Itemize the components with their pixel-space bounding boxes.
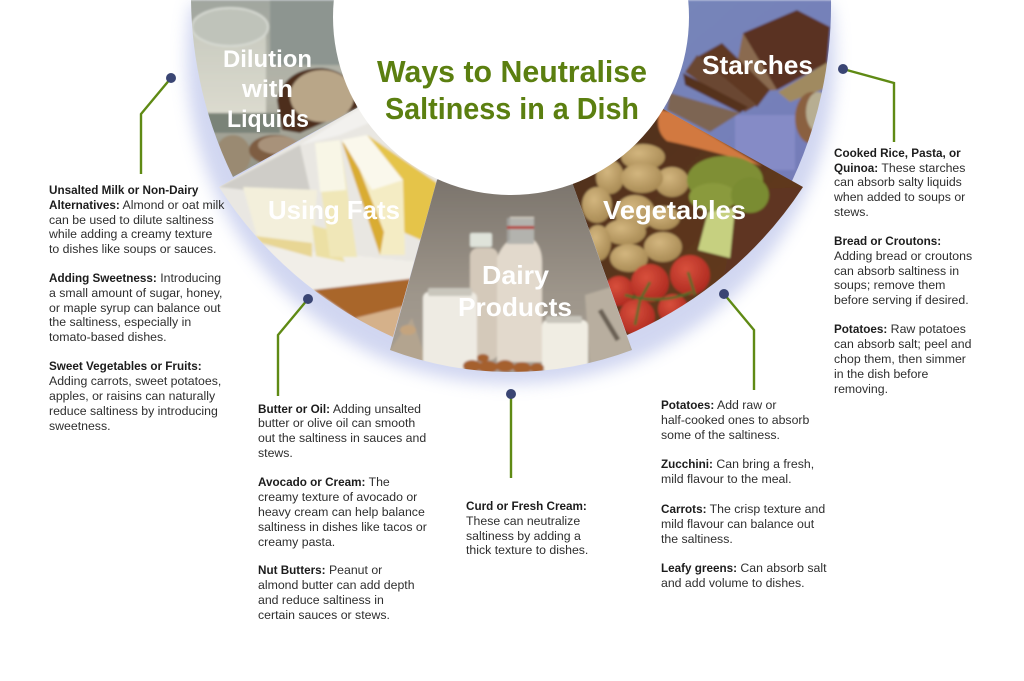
text block: fats tips: butter or olive oil can smooth — [258, 416, 415, 430]
soft blue glow around the fan — [187, 4, 835, 384]
text block: starch tips: can absorb salt; peel and — [834, 337, 972, 351]
text block: fats tips — [258, 402, 427, 622]
text block: dairy tips: These can neutralize — [466, 514, 580, 528]
text block: vegetable tips: Potatoes: Add raw or — [661, 398, 776, 412]
text block: dairy tips: thick texture to dishes. — [466, 543, 588, 557]
text block: starch tips: before serving if desired. — [834, 293, 969, 307]
text block: dilution tips: Unsalted Milk or Non-Dairy — [49, 184, 199, 197]
text block: starch tips: Cooked Rice, Pasta, or — [834, 147, 961, 160]
text block: fats tips: saltiness in dishes like tacos or — [258, 520, 427, 534]
connector: starches — [838, 64, 894, 142]
panel: dilution with liquids photo — [191, 0, 358, 177]
text block: starch tips: Quinoa: These starches — [834, 161, 965, 175]
text block: vegetable tips: half-cooked ones to absorb — [661, 413, 810, 427]
text block: dilution tips: reduce saltiness by introducing — [49, 404, 218, 418]
text block: starch tips: Adding bread or croutons — [834, 249, 972, 263]
panel: vegetables photo — [572, 109, 803, 335]
text block: vegetable tips: and add volume to dishes. — [661, 576, 805, 590]
text block: dilution tips: or maple syrup can balance out — [49, 301, 221, 315]
heading: dilution with liquids: Dilution — [223, 46, 312, 73]
text block: starch tips: Potatoes: Raw potatoes — [834, 322, 966, 336]
bottles — [470, 248, 498, 360]
heading: dilution with liquids: Liquids — [227, 106, 309, 133]
panel: dairy products photo — [385, 175, 635, 375]
text block: dilution tips: while adding a creamy texture — [48, 227, 213, 241]
bread slices — [697, 43, 770, 107]
heading: dairy products: Products — [458, 292, 572, 322]
text block: fats tips: certain sauces or stews. — [258, 608, 390, 622]
almonds — [400, 325, 544, 374]
text block: fats tips: Avocado or Cream: The — [258, 475, 390, 489]
text block: dilution tips: Sweet Vegetables or Fruits: — [49, 360, 202, 373]
text block: dilution tips: apples, or raisins can naturally — [49, 389, 216, 403]
butter blocks — [367, 135, 437, 243]
text block: dairy tips: Curd or Fresh Cream: — [466, 500, 587, 513]
text block: vegetable tips: some of the saltiness. — [661, 428, 780, 442]
text block: dilution tips — [48, 184, 225, 433]
text block: fats tips: Butter or Oil: Adding unsalted — [258, 402, 421, 416]
bread loaf — [743, 10, 830, 90]
broccoli — [698, 208, 735, 258]
heading: dilution with liquids — [223, 46, 312, 133]
tomatoes — [604, 255, 710, 335]
connector: dilution — [141, 73, 176, 174]
potatoes — [582, 144, 689, 272]
text block: vegetable tips: Leafy greens: Can absorb salt — [661, 561, 827, 575]
text block: vegetable tips: mild flavour to the meal. — [661, 472, 792, 486]
connector: dairy — [506, 389, 516, 478]
text block: dilution tips: a small amount of sugar, honey, — [49, 286, 222, 300]
title: Ways to Neutralise — [377, 54, 647, 89]
text block: starch tips — [833, 147, 972, 396]
heading: vegetables: Vegetables — [603, 195, 746, 225]
connector: vegetables — [719, 289, 754, 390]
text block: fats tips: out the saltiness in sauces and — [258, 431, 426, 445]
text block: starch tips: can absorb saltiness in — [834, 264, 959, 278]
panel: starches photo — [664, 0, 831, 181]
text block: fats tips: heavy cream can help balance — [258, 505, 425, 519]
centre circle — [333, 0, 689, 195]
text block: starch tips: stews. — [834, 205, 869, 219]
text block: starch tips: soups; remove them — [834, 278, 945, 292]
text block: fats tips: stews. — [258, 446, 293, 460]
heading: dilution with liquids: with — [241, 76, 293, 103]
text block: vegetable tips: mild flavour can balance out — [661, 517, 815, 531]
title — [377, 54, 647, 126]
heading: dairy products: Dairy — [482, 260, 550, 290]
text block: dairy tips — [466, 500, 588, 557]
text block: dilution tips: the saltiness, especially in — [49, 315, 191, 329]
text block: vegetable tips: Zucchini: Can bring a fresh, — [661, 457, 814, 471]
text block: starch tips: Bread or Croutons: — [834, 235, 941, 248]
text block: starch tips: when added to soups or — [833, 190, 965, 204]
text block: dilution tips: Adding Sweetness: Introducing — [49, 271, 221, 285]
text block: dilution tips: Adding carrots, sweet potatoes, — [49, 374, 221, 388]
text block: vegetable tips: the saltiness. — [661, 532, 733, 546]
text block: fats tips: and reduce saltiness in — [258, 593, 384, 607]
text block: dilution tips: to dishes like soups or sauces. — [49, 242, 216, 256]
text block: starch tips: removing. — [834, 382, 888, 396]
text block: vegetable tips — [661, 398, 827, 590]
text block: dilution tips: tomato-based dishes. — [49, 330, 167, 344]
text block: starch tips: in the dish before — [834, 367, 929, 381]
text block: dilution tips: sweetness. — [49, 419, 111, 433]
carrot — [658, 110, 762, 166]
text block: dairy tips: saltiness by adding a — [466, 529, 581, 543]
heading: starches: Starches — [702, 50, 813, 80]
text block: fats tips: creamy pasta. — [258, 535, 335, 549]
panel: using fats photo — [219, 108, 437, 337]
wood board — [313, 278, 410, 322]
text block: fats tips: almond butter can add depth — [258, 578, 415, 592]
text block: vegetable tips: Carrots: The crisp texture and — [661, 502, 825, 516]
text block: starch tips: chop them, then simmer — [834, 352, 966, 366]
text block: starch tips: can absorb salty liquids — [834, 175, 962, 189]
text block: fats tips: Nut Butters: Peanut or — [258, 563, 382, 577]
heading: using fats: Using Fats — [268, 195, 400, 225]
text block: dilution tips: can be used to dilute saltiness — [49, 213, 214, 227]
text block: dilution tips: Alternatives: Almond or oat milk — [49, 198, 225, 212]
cloth — [585, 285, 632, 364]
jars — [423, 292, 477, 370]
heading: dairy products — [458, 260, 572, 322]
connector: fats — [278, 294, 313, 396]
title: Saltiness in a Dish — [385, 91, 639, 126]
text block: fats tips: creamy texture of avocado or — [258, 490, 417, 504]
